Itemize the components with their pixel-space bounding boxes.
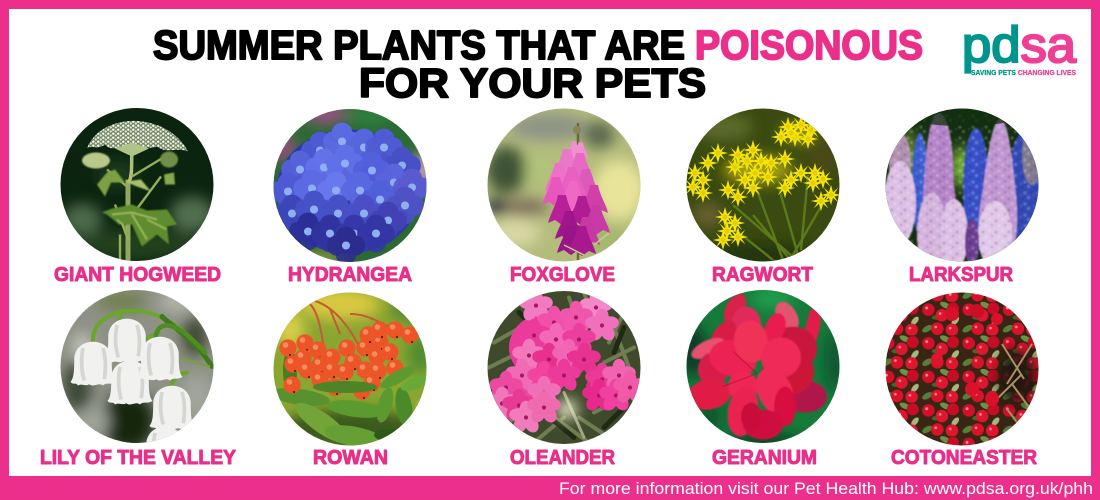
- plant photo: oleander: [488, 291, 640, 444]
- title: FOR YOUR PETS: [359, 60, 706, 106]
- title: POISONOUS: [695, 22, 923, 68]
- plant photo: cotoneaster: [882, 289, 1042, 449]
- plant photo: rowan: [274, 292, 426, 446]
- plant photo: foxglove: [484, 105, 645, 265]
- footer text: For more information visit our Pet Health Hub: www.pdsa.org.uk/phh: [559, 479, 1093, 498]
- label: lily of the valley: LILY OF THE VALLEY: [40, 447, 237, 469]
- plant photo: ragwort: [683, 105, 843, 267]
- label: rowan: ROWAN: [313, 447, 388, 469]
- plant photo: lily of the valley: [60, 290, 214, 443]
- plant photo: giant hogweed: [57, 104, 217, 264]
- label: ragwort: RAGWORT: [712, 264, 813, 286]
- label: giant hogweed: GIANT HOGWEED: [54, 264, 221, 286]
- plant photo: larkspur: [886, 108, 1038, 262]
- label: larkspur: LARKSPUR: [909, 264, 1014, 286]
- title: [153, 22, 923, 106]
- plant photo: geranium: [686, 290, 840, 443]
- label: foxglove: FOXGLOVE: [510, 264, 615, 286]
- plant photo: hydrangea: [274, 109, 426, 262]
- title: SUMMER PLANTS THAT ARE: [153, 22, 685, 68]
- label: cotoneaster: COTONEASTER: [891, 447, 1038, 469]
- label: oleander: OLEANDER: [510, 447, 616, 469]
- label: hydrangea: HYDRANGEA: [288, 264, 412, 286]
- logo: pdsa: pdsa: [962, 17, 1076, 73]
- label: geranium: GERANIUM: [712, 447, 817, 469]
- logo: pdsa: SAVING PETS CHANGING LIVES: [971, 68, 1076, 77]
